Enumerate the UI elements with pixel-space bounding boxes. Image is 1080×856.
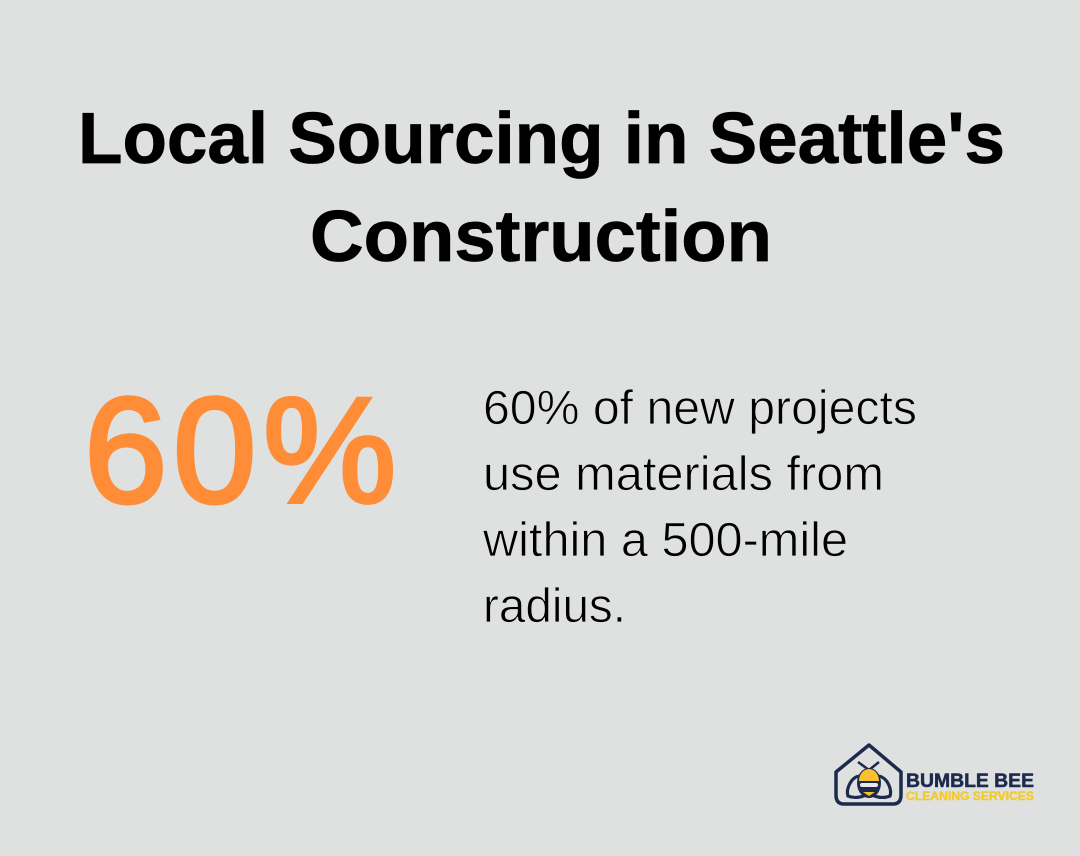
logo tagline: CLEANING SERVICES (906, 791, 1034, 803)
icon: house with bee (836, 745, 901, 804)
logo wordmark: BUMBLE BEE (906, 771, 1034, 792)
title: Construction (310, 197, 772, 277)
logo: Bumble Bee Cleaning Services (836, 745, 1034, 804)
statistic description: within a 500-mile (482, 514, 848, 567)
title (78, 99, 1005, 277)
statistic description: radius. (483, 580, 626, 633)
statistic description: use materials from (483, 448, 884, 501)
statistic description: 60% of new projects (483, 382, 917, 435)
big statistic: 60%: 60% (84, 366, 396, 534)
title: Local Sourcing in Seattle's (78, 99, 1005, 179)
statistic description (482, 382, 917, 633)
